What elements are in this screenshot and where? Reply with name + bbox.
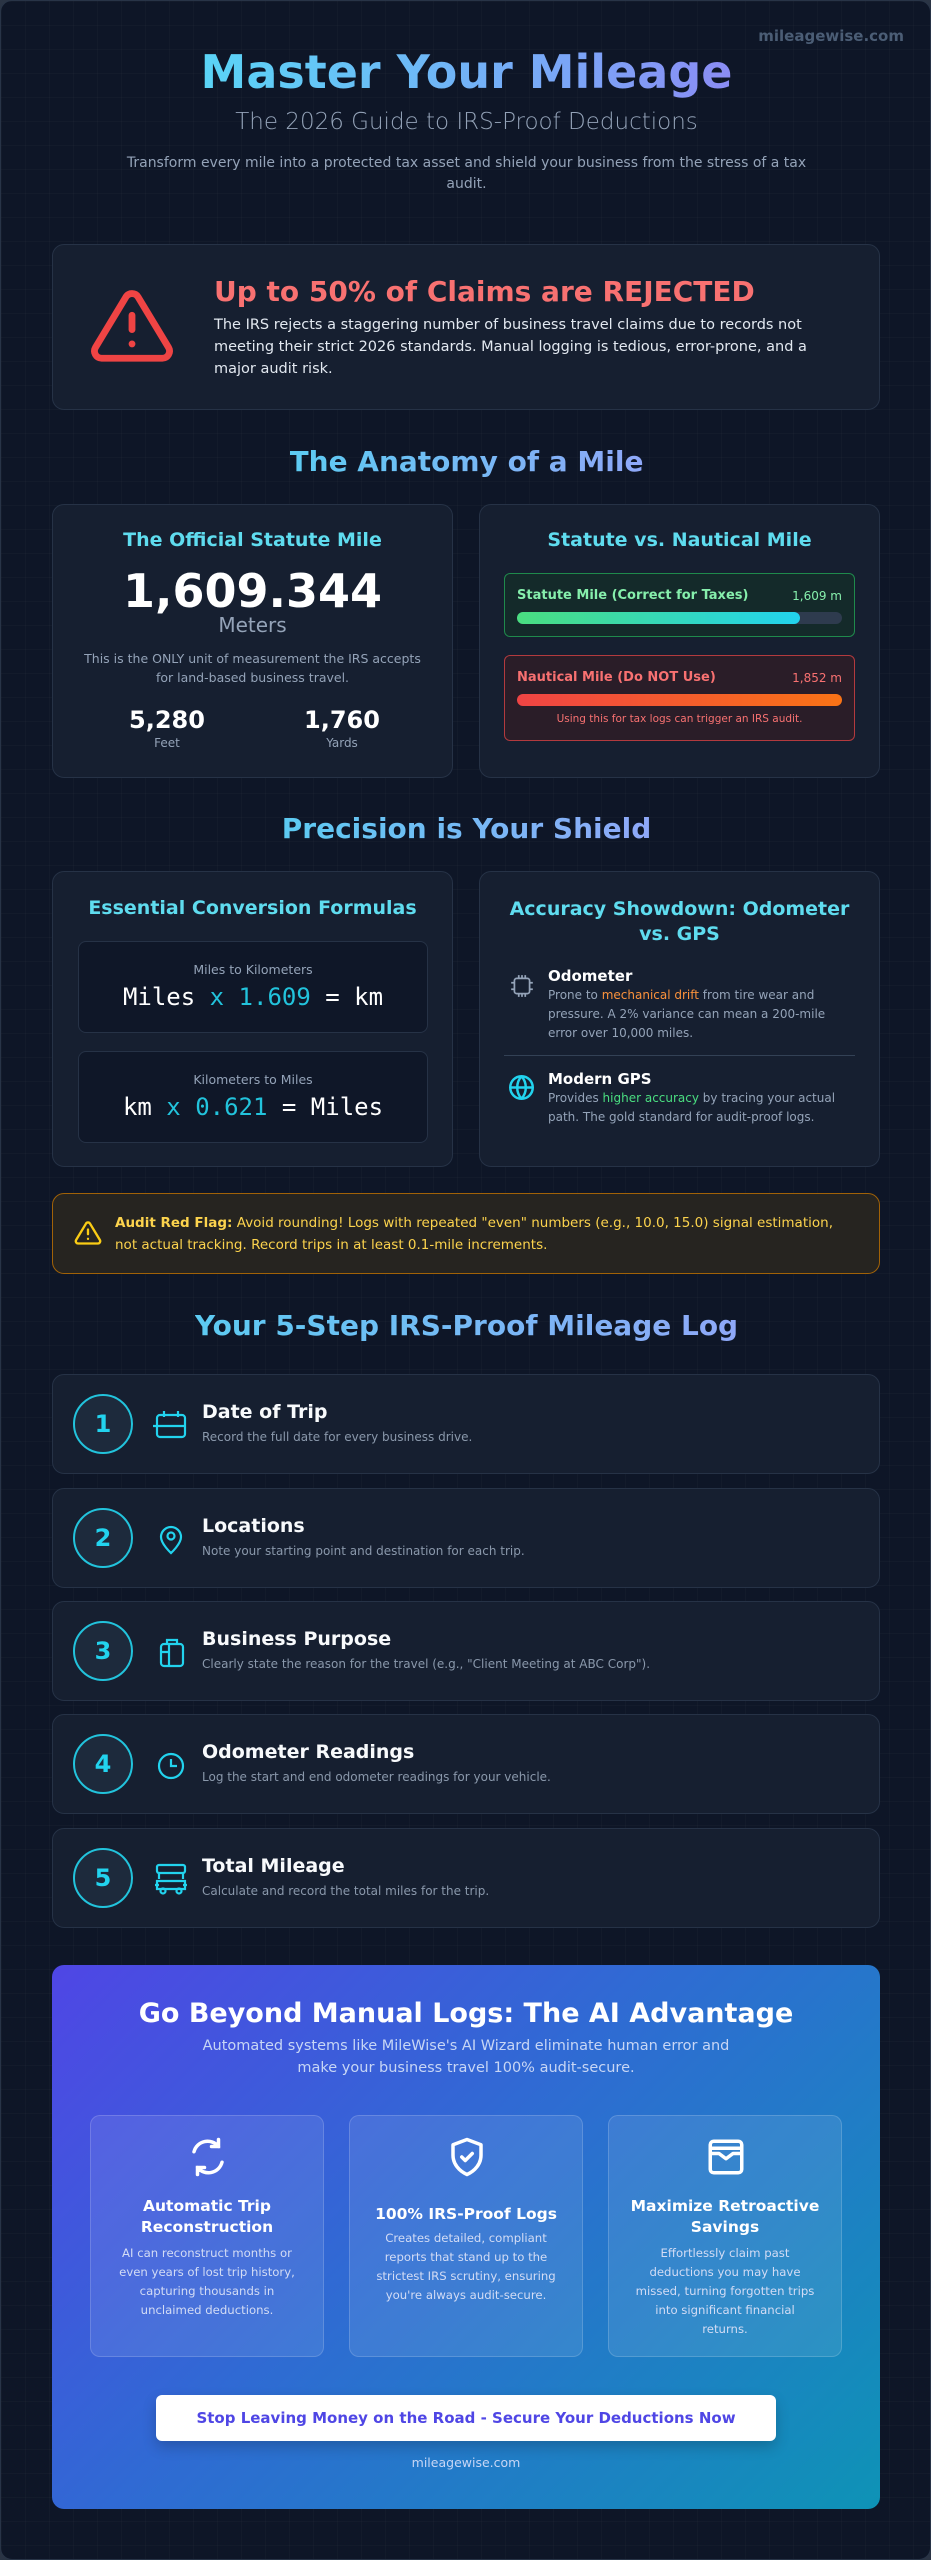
card: reconstruction: unclaimed deductions. <box>141 2303 273 2317</box>
heading: precision: Precision is Your Shield <box>282 812 651 845</box>
formula: km to miles: Kilometers to Miles <box>193 1072 313 1087</box>
callout: audit red flag: Audit Red Flag: Avoid rounding! Logs with repeated "even" numbers (e.g., 10.0, 15.0) signal estimation, not actual tracking. Record trips in at least 0.1-mile increments. <box>115 1215 833 1253</box>
panel: conversion formulas: Essential Conversion Formulas <box>88 897 417 919</box>
bar: nautical: Nautical Mile (Do NOT Use) <box>517 670 716 685</box>
card: reconstruction: capturing thousands in <box>140 2284 274 2298</box>
step 5: Total Mileage <box>202 1855 345 1877</box>
step 1: Record the full date for every business drive. <box>202 1430 472 1444</box>
site label: mileagewise.com <box>758 27 904 45</box>
card: reconstruction: even years of lost trip history, <box>119 2265 295 2279</box>
icon: warning <box>74 1221 102 1245</box>
card: irs-proof: strictest IRS scrutiny, ensuring <box>376 2269 556 2283</box>
big number: 1,609.344 <box>123 564 382 618</box>
icon: wallet <box>708 2140 744 2174</box>
icon: location pin <box>160 1526 182 1554</box>
description: This is the ONLY unit of measurement the IRS accepts for land-based business travel. <box>84 651 421 685</box>
text: gps: Modern GPS <box>548 1070 652 1088</box>
text: gps: Provides higher accuracy by tracing your actual path. The gold standard for audit-proof logs. <box>548 1091 835 1124</box>
callout: audit red flag <box>52 1193 880 1274</box>
formula: km to miles <box>78 1051 428 1143</box>
card: retroactive savings: Effortlessly claim past <box>661 2246 789 2260</box>
card: retroactive savings: Maximize Retroactive Savings <box>631 2197 819 2236</box>
step 5: Calculate and record the total miles for the trip. <box>202 1884 489 1898</box>
stat: yards: Yards <box>326 736 358 750</box>
card: retroactive savings: deductions you may have <box>649 2265 801 2279</box>
step 3 <box>52 1601 880 1701</box>
stat: yards <box>304 706 380 750</box>
step 3: 3 <box>95 1637 111 1665</box>
card: reconstruction <box>90 2115 324 2357</box>
button: cta <box>156 2395 776 2441</box>
heading: anatomy: The Anatomy of a Mile <box>290 445 643 478</box>
subtitle: The 2026 Guide to IRS-Proof Deductions <box>235 109 698 135</box>
card: irs-proof: Creates detailed, compliant <box>385 2231 547 2245</box>
icon: chip <box>511 975 533 997</box>
icon: shield <box>451 2138 483 2176</box>
footer url: mileagewise.com <box>412 2455 520 2470</box>
card: irs-proof: reports that stand up to the <box>385 2250 547 2264</box>
panel: conversion formulas <box>52 871 453 1167</box>
card: retroactive savings <box>608 2115 842 2357</box>
bar: statute <box>504 573 855 637</box>
bar: nautical: Using this for tax logs can trigger an IRS audit. <box>557 713 802 725</box>
step 5: 5 <box>95 1864 111 1892</box>
cta heading: Go Beyond Manual Logs: The AI Advantage <box>139 1998 793 2029</box>
text: gps <box>548 1070 835 1124</box>
tagline: Transform every mile into a protected tax asset and shield your business from the stress of a tax audit. <box>127 155 806 192</box>
formula: miles to km <box>78 941 428 1033</box>
panel: rejection alert <box>52 244 880 410</box>
icon: globe <box>509 1075 534 1100</box>
bar: nautical: 1,852 m <box>792 671 842 685</box>
icon: calendar <box>153 1411 186 1438</box>
stat: feet: 5,280 <box>129 706 205 734</box>
panel: statute vs nautical: Statute vs. Nautical Mile <box>547 529 812 551</box>
step 2: Note your starting point and destination for each trip. <box>202 1544 525 1558</box>
bar: statute: Statute Mile (Correct for Taxes) <box>517 588 748 603</box>
step 1: Date of Trip <box>202 1401 327 1423</box>
card: irs-proof <box>349 2115 583 2357</box>
step 4: Odometer Readings <box>202 1741 414 1763</box>
step 3: Business Purpose <box>202 1628 391 1650</box>
icon: warning triangle <box>91 290 173 362</box>
icon: car <box>155 1864 187 1895</box>
panel: statute mile: Meters <box>218 613 287 637</box>
step 4: 4 <box>95 1750 111 1778</box>
card: irs-proof: you're always audit-secure. <box>386 2288 546 2302</box>
formula: miles to km: Miles x 1.609 = km <box>123 983 383 1011</box>
card: retroactive savings: missed, turning forgotten trips <box>636 2284 814 2298</box>
bar: statute: 1,609 m <box>792 589 842 603</box>
panel: AI advantage <box>52 1965 880 2509</box>
panel: odometer vs gps <box>479 871 880 1167</box>
step 1 <box>52 1374 880 1474</box>
step 2 <box>52 1488 880 1588</box>
icon: briefcase <box>160 1638 184 1668</box>
alert body: The IRS rejects a staggering number of business travel claims due to records not meeting their strict 2026 standards. Manual logging is tedious, error-prone, and a major audit risk. <box>214 317 807 377</box>
card: irs-proof: 100% IRS-Proof Logs <box>375 2205 557 2223</box>
stat: feet: Feet <box>154 736 180 750</box>
step 2: 2 <box>95 1524 111 1552</box>
alert heading: Up to 50% of Claims are REJECTED <box>214 275 755 308</box>
card: retroactive savings: returns. <box>702 2322 748 2336</box>
heading: 5 steps: Your 5-Step IRS-Proof Mileage Log <box>195 1309 738 1342</box>
card: retroactive savings: into significant financial <box>655 2303 795 2317</box>
card: reconstruction: Automatic Trip Reconstruction <box>141 2197 273 2236</box>
stat: yards: 1,760 <box>304 706 380 734</box>
formula: km to miles: km x 0.621 = Miles <box>123 1093 383 1121</box>
button: cta: Stop Leaving Money on the Road - Secure Your Deductions Now <box>196 2409 736 2427</box>
step 3: Clearly state the reason for the travel (e.g., "Client Meeting at ABC Corp"). <box>202 1657 650 1671</box>
step 4 <box>52 1714 880 1814</box>
step 4: Log the start and end odometer readings for your vehicle. <box>202 1770 551 1784</box>
step 5 <box>52 1828 880 1928</box>
text: odometer: Odometer <box>548 967 632 985</box>
text: odometer: Prone to mechanical drift from tire wear and pressure. A 2% variance can mean a 200-mile error over 10,000 miles. <box>548 988 825 1040</box>
step 2: Locations <box>202 1515 305 1537</box>
title: Master Your Mileage <box>201 45 732 99</box>
panel: statute mile <box>52 504 453 778</box>
formula: miles to km: Miles to Kilometers <box>193 962 313 977</box>
panel: odometer vs gps: Accuracy Showdown: Odometer vs. GPS <box>510 898 849 945</box>
bar: nautical <box>504 655 855 741</box>
icon: refresh <box>192 2138 224 2176</box>
panel: statute mile: The Official Statute Mile <box>123 529 382 551</box>
panel: statute vs nautical <box>479 504 880 778</box>
cta subtext: Automated systems like MileWise's AI Wizard eliminate human error and make your business travel 100% audit-secure. <box>203 2038 729 2076</box>
stat: feet <box>129 706 205 750</box>
step 1: 1 <box>95 1410 111 1438</box>
card: reconstruction: AI can reconstruct months or <box>122 2246 292 2260</box>
icon: clock <box>158 1752 184 1780</box>
